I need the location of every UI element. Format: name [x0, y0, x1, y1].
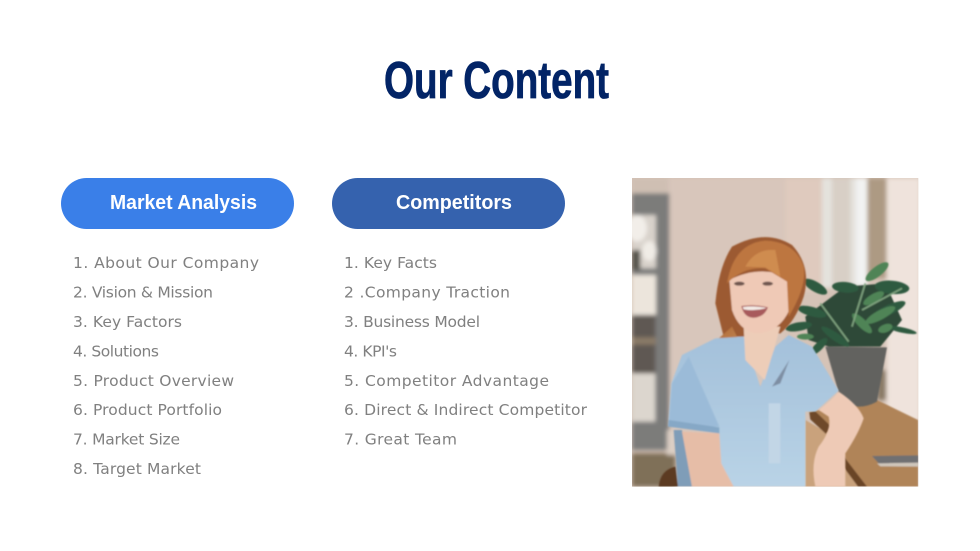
list: market analysis topics: 3. Key Factors	[73, 313, 182, 331]
pill heading: market analysis: Market Analysis	[110, 192, 257, 214]
title: Our Content	[384, 52, 609, 110]
photo: smiling woman beside a potted plant	[627, 178, 920, 487]
list: competitors topics: 7. Great Team	[344, 430, 457, 448]
panel: market analysis	[61, 178, 294, 478]
list: competitors topics: 2 .Company Traction	[344, 284, 510, 302]
list: market analysis topics: 5. Product Overview	[73, 372, 234, 390]
list: competitors topics: 6. Direct & Indirect Competitor	[344, 401, 588, 419]
pill heading: competitors	[332, 178, 565, 229]
list: market analysis topics	[73, 254, 259, 478]
list: competitors topics: 4. KPI's	[344, 342, 397, 360]
plant and pot	[785, 259, 917, 407]
list: competitors topics	[344, 254, 588, 448]
list: competitors topics: 5. Competitor Advantage	[344, 372, 549, 390]
list: market analysis topics: 6. Product Portfolio	[73, 401, 222, 419]
pill heading: competitors: Competitors	[396, 192, 512, 214]
list: market analysis topics: 1. About Our Company	[73, 254, 259, 272]
list: market analysis topics: 7. Market Size	[73, 430, 180, 448]
list: market analysis topics: 8. Target Market	[73, 460, 201, 478]
list: competitors topics: 3. Business Model	[344, 313, 480, 331]
pill heading: market analysis	[61, 178, 294, 229]
list: competitors topics: 1. Key Facts	[344, 254, 437, 272]
list: market analysis topics: 4. Solutions	[73, 342, 159, 360]
panel: competitors	[332, 178, 588, 448]
wooden table	[805, 400, 918, 487]
woman	[659, 237, 864, 487]
list: market analysis topics: 2. Vision & Mission	[73, 284, 213, 302]
